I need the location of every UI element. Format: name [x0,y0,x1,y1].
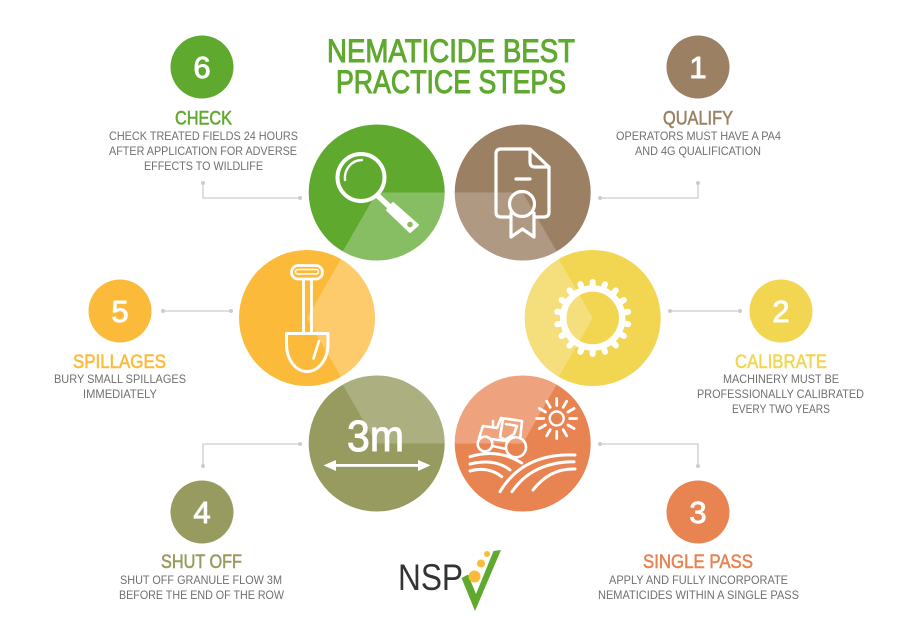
step 6 description [109,129,298,173]
step 4 number badge: 4 [193,495,211,530]
title [327,33,575,100]
step 6 description: CHECK TREATED FIELDS 24 HOURS [109,129,298,143]
step 5 description [54,372,186,401]
NSP logo [398,550,501,611]
step 1 number badge: 1 [689,50,707,85]
step 5 description: BURY SMALL SPILLAGES [54,372,186,386]
step 3 number badge: 3 [689,495,707,530]
connector 1 [598,181,700,200]
circle 5: shovel [239,250,375,386]
step 6 heading: CHECK [175,108,232,130]
step 4 heading: SHUT OFF [161,552,242,573]
step 3 description: APPLY AND FULLY INCORPORATE [609,573,788,587]
step 2 heading: CALIBRATE [735,352,827,373]
connector 2 [668,309,742,313]
step 4 description: BEFORE THE END OF THE ROW [119,588,285,602]
icon: shovel [286,266,328,372]
circle 4: 3m distance [309,375,445,512]
circle 3: tractor in field [455,375,591,512]
step 2 number badge: 2 [772,294,790,329]
title: PRACTICE STEPS [336,64,566,100]
step 3 number badge [666,480,730,544]
step 5 number badge: 5 [111,294,129,329]
step 4 description: SHUT OFF GRANULE FLOW 3M [120,573,282,587]
icon: field furrows [470,454,575,492]
step 1 description: OPERATORS MUST HAVE A PA4 [616,129,781,143]
icon: magnifying glass [338,154,418,232]
step 6 number badge: 6 [193,50,211,85]
icon: certificate document [496,149,549,237]
NSP logo: NSP [398,557,463,598]
circle 6: magnifying glass [309,124,445,261]
connector 6 [201,181,302,200]
step 2 number badge [750,280,812,342]
title: NEMATICIDE BEST [327,33,575,69]
icon: sun [537,398,577,438]
step 5 number badge [88,280,152,342]
step 4 description [119,573,285,602]
logo check mark [462,550,501,611]
icon label: 3m: 3m [347,412,404,461]
icon: cog [557,282,628,354]
connector 4 [201,442,302,468]
step 5 description: IMMEDIATELY [83,387,157,401]
icon: tractor [478,418,526,457]
step 6 number badge [170,36,234,98]
connector 3 [598,442,700,468]
connector 5 [161,309,233,313]
step 2 description [697,372,864,416]
step 6 description: AFTER APPLICATION FOR ADVERSE [109,144,297,158]
step 5 heading: SPILLAGES [73,352,166,373]
step 4 number badge [170,480,234,544]
step 1 description: AND 4G QUALIFICATION [635,144,761,158]
step 1 heading: QUALIFY [663,108,733,130]
logo dots [468,551,490,582]
step 3 description: NEMATICIDES WITHIN A SINGLE PASS [598,588,799,602]
step 3 heading: SINGLE PASS [643,552,753,573]
step 3 description [598,573,799,602]
step 6 description: EFFECTS TO WILDLIFE [144,159,263,173]
step 1 number badge [666,36,730,98]
circle 2: cog [525,250,661,386]
step 1 description [616,129,781,158]
circle 1: certificate [455,124,591,261]
step 2 description: PROFESSIONALLY CALIBRATED [697,387,864,401]
step 2 description: EVERY TWO YEARS [732,402,830,416]
icon: double arrow [324,460,430,471]
step 2 description: MACHINERY MUST BE [723,372,839,386]
